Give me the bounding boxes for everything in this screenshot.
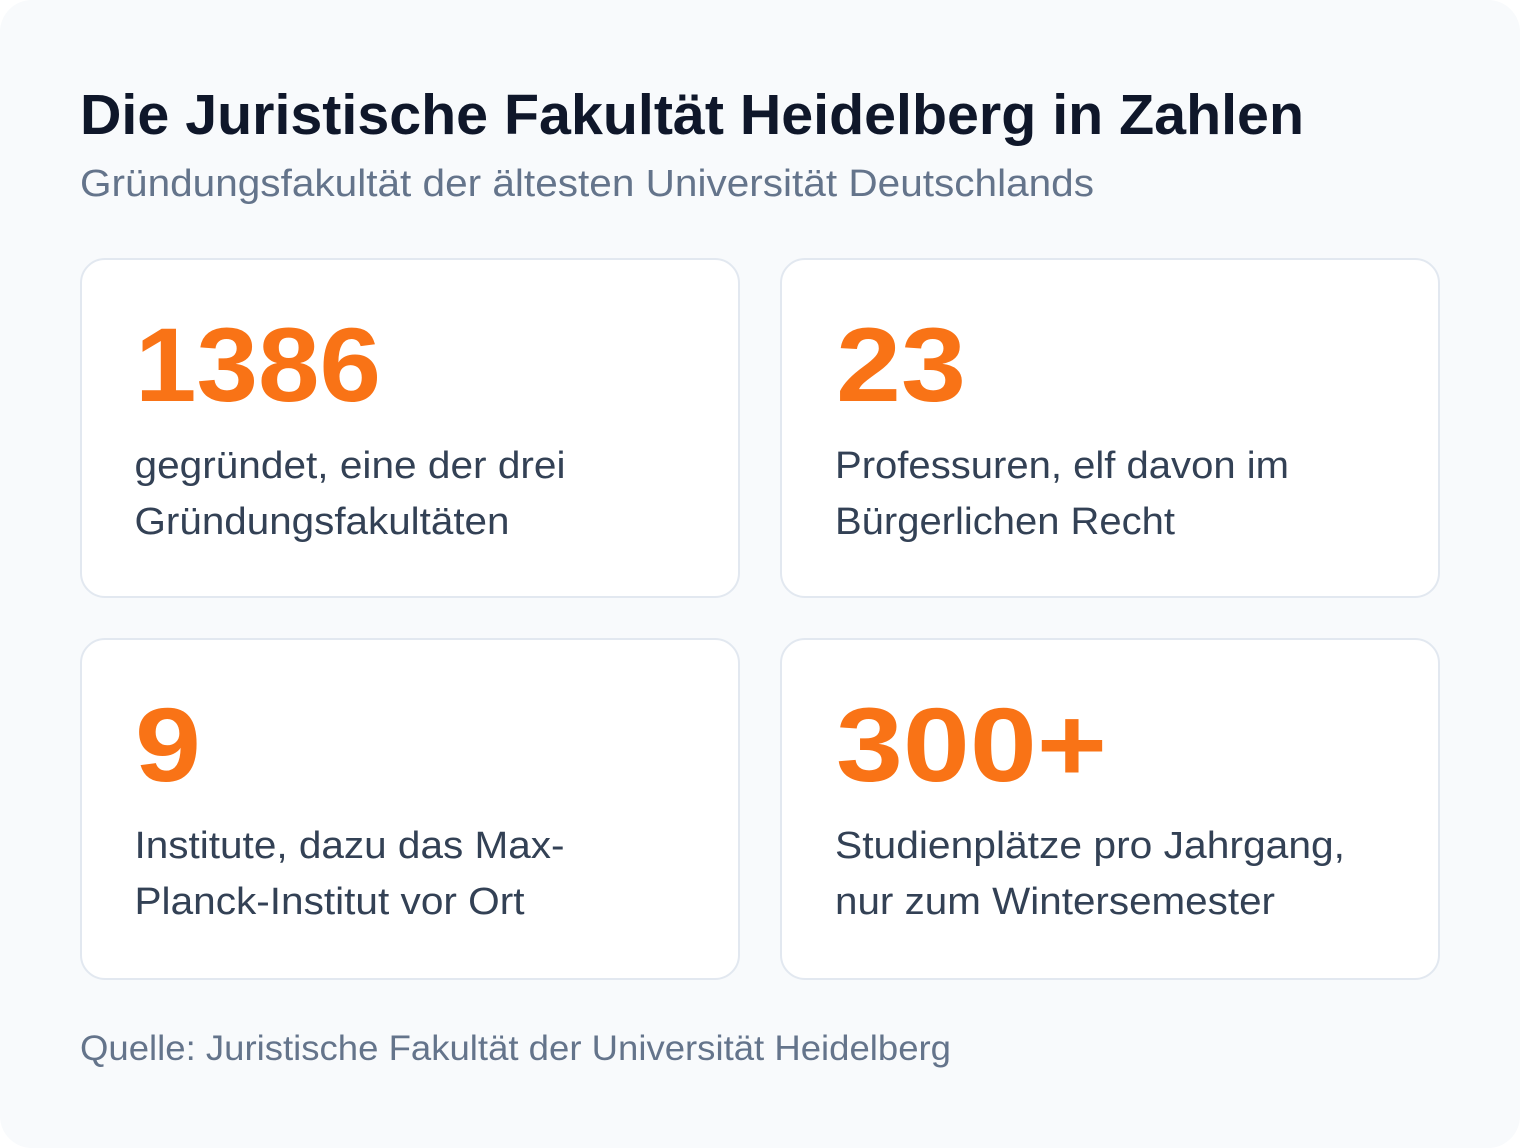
title: Die Juristische Fakultät Heidelberg in Zahlen: [80, 83, 1304, 147]
panel: 9: [81, 639, 739, 979]
panel: 23: [781, 259, 1439, 597]
number: 1386: 1386: [135, 307, 381, 424]
description: 23: Professuren, elf davon im: [835, 445, 1289, 487]
description: 9: Institute, dazu das Max-: [134, 825, 564, 867]
number: 9: 9: [135, 687, 201, 804]
subtitle: Gründungsfakultät der ältesten Universität Deutschlands: [80, 163, 1094, 205]
panel: 1386: [81, 259, 739, 597]
description: 23: Bürgerlichen Recht: [835, 501, 1175, 543]
number: 23: 23: [836, 307, 966, 424]
source: Quelle: Juristische Fakultät der Universität Heidelberg: [80, 1029, 951, 1068]
description: 300+: Studienplätze pro Jahrgang,: [835, 825, 1345, 867]
description: 300+: nur zum Wintersemester: [835, 881, 1275, 923]
number: 300+: 300+: [836, 687, 1107, 804]
panel: 300+: [781, 639, 1439, 979]
description: 1386: gegründet, eine der drei: [134, 445, 566, 487]
description: 1386: Gründungsfakultäten: [134, 501, 510, 543]
description: 9: Planck-Institut vor Ort: [134, 881, 525, 923]
